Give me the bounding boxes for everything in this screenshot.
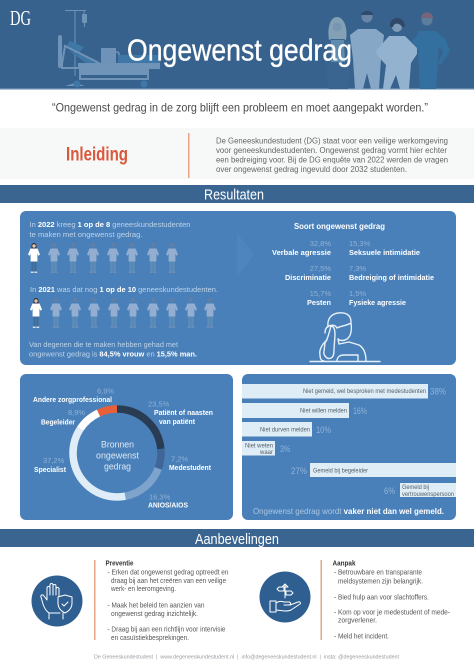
text: preventie: draag bij aan het creëren van een veilige bbox=[111, 576, 226, 585]
bar: besproken met medestudenten: Niet gemeld, wel besproken met medestudenten bbox=[303, 388, 426, 395]
illustration: hospital bed and IV pole bbox=[58, 10, 160, 88]
donut centre label: gedrag bbox=[104, 462, 131, 472]
donut labels: ANIOS/AIOS bbox=[148, 500, 188, 510]
text: 2022 bbox=[30, 220, 190, 239]
list: types left column: Discriminatie bbox=[285, 273, 331, 282]
donut labels: 6,9% bbox=[97, 386, 114, 396]
text: preventie: werk- en leeromgeving. bbox=[110, 584, 176, 593]
donut labels: 8,9% bbox=[68, 408, 85, 417]
text: preventie: Preventie bbox=[106, 560, 134, 568]
list: types right column: Seksuele intimidatie bbox=[349, 248, 420, 257]
bar: niet weten waar bbox=[242, 441, 290, 456]
donut centre label: Bronnen bbox=[101, 440, 134, 450]
text: preventie: - Erken dat ongewenst gedrag optreedt en bbox=[108, 568, 228, 576]
intro text bbox=[216, 136, 448, 174]
text: preventie: - Maak het beleid ten aanzien van bbox=[108, 600, 204, 610]
bar: niet durven melden: Niet durven melden bbox=[260, 426, 310, 434]
donut labels: Begeleider bbox=[41, 418, 75, 426]
text: 2021: In 2021 was dat nog 1 op de 10 geneeskundestudenten. bbox=[30, 285, 218, 294]
bar: besproken met medestudenten bbox=[242, 384, 446, 398]
bar chart conclusion: Ongewenst gedrag wordt vaker niet dan wel gemeld. bbox=[253, 506, 444, 516]
bar: niet weten waar: waar bbox=[259, 449, 274, 456]
bar: niet willen melden bbox=[242, 403, 367, 418]
text: gender split: Van degenen die te maken hebben gehad met bbox=[29, 340, 179, 349]
text: preventie: ongewenst gedrag inzichtelijk. bbox=[111, 609, 198, 618]
icon: hand with signpost bbox=[260, 572, 310, 622]
list: types left column: Verbale agressie bbox=[272, 248, 331, 257]
heading: soort ongewenst gedrag: Soort ongewenst gedrag bbox=[294, 222, 385, 231]
intro text: voor geneeskundestudenten. Ongewenst gedrag vormt hier echter bbox=[216, 146, 447, 155]
logo: DG bbox=[10, 6, 31, 30]
text: aanpak: - Betrouwbare en transparante bbox=[334, 568, 422, 576]
list: types right column: Fysieke agressie bbox=[349, 298, 406, 307]
list: types left column: 32,8% bbox=[310, 239, 331, 248]
donut labels: Andere zorgprofessional bbox=[33, 395, 112, 404]
quote: “Ongewenst gedrag in de zorg blijft een probleem en moet aangepakt worden.” bbox=[52, 100, 428, 114]
donut labels: 37,2% bbox=[43, 456, 65, 465]
bar: niet durven melden: 10% bbox=[316, 425, 331, 436]
panel: donut chart bbox=[20, 374, 233, 520]
bar: gemeld bij begeleider: 27% bbox=[291, 466, 307, 477]
orange divider: aanpak bbox=[320, 560, 322, 640]
text: aanpak: meldsystemen zijn belangrijk. bbox=[338, 576, 423, 586]
donut labels: Patiënt of naasten bbox=[154, 408, 213, 417]
section heading: resultaten bbox=[0, 185, 474, 204]
icon: hand with shield bbox=[32, 576, 82, 626]
donut labels: 16,3% bbox=[149, 492, 171, 502]
bar: niet weten waar: Niet weten bbox=[245, 442, 273, 450]
text: aanpak: - Bied hulp aan voor slachtoffers. bbox=[334, 592, 429, 602]
text: preventie: - Draag bij aan een richtlijn voor intervisie bbox=[108, 624, 226, 634]
text: aanpak bbox=[332, 560, 451, 640]
bar: gemeld bij vertrouwenspersoon: Gemeld bij bbox=[402, 484, 429, 491]
orange divider: preventie bbox=[94, 560, 96, 640]
intro text: over ongewenst gedrag ingevuld door 2032 studenten. bbox=[216, 165, 407, 174]
pictogram: 1 in 10 bbox=[30, 298, 216, 328]
donut labels: 23,5% bbox=[148, 400, 170, 408]
list: types right column: 15,3% bbox=[349, 239, 371, 248]
text: gender split: ongewenst gedrag is 84,5% vrouw en 15,5% man. bbox=[29, 350, 197, 358]
bar: gemeld bij begeleider bbox=[291, 463, 456, 477]
list: types left column: 15,7% bbox=[310, 289, 331, 298]
pictogram: 1 in 8 bbox=[28, 243, 178, 273]
text: preventie: en casuïstiekbesprekingen. bbox=[111, 633, 189, 642]
panel: bar chart bbox=[242, 374, 456, 520]
donut labels: Specialist bbox=[34, 465, 66, 474]
bar: besproken met medestudenten: 38% bbox=[430, 386, 446, 398]
text: 2022: In 2022 kreeg 1 op de 8 geneeskundestudenten bbox=[30, 220, 190, 229]
text: aanpak: Aanpak bbox=[332, 560, 356, 568]
donut labels: van patiënt bbox=[159, 417, 195, 426]
panel: inleiding bbox=[0, 128, 474, 179]
donut labels: 7,2% bbox=[171, 454, 188, 464]
list: types left column: 27,5% bbox=[310, 264, 331, 273]
panel: prevalence and types bbox=[20, 211, 456, 365]
list: types right column: Bedreiging of intimidatie bbox=[349, 273, 434, 282]
bar: gemeld bij vertrouwenspersoon: vertrouwenspersoon bbox=[402, 491, 454, 498]
list: types left column: Pesten bbox=[307, 298, 331, 307]
donut chart bbox=[73, 409, 161, 497]
bar: gemeld bij vertrouwenspersoon bbox=[384, 483, 456, 498]
text: aanpak: zorgverlener. bbox=[338, 616, 377, 624]
list: types left column bbox=[272, 239, 331, 307]
footer: De Geneeskundestudent | www.degeneeskundestudent.nl | info@degeneeskundestudent.nl | insta: @degeneeskundestudent bbox=[94, 654, 399, 660]
donut labels bbox=[33, 386, 213, 510]
bar: gemeld bij vertrouwenspersoon: 6% bbox=[384, 486, 395, 497]
bar: gemeld bij begeleider: Gemeld bij begeleider bbox=[313, 468, 369, 474]
intro text: een bedreiging voor. Bij de DG enquête van 2022 werden de vragen bbox=[216, 156, 448, 164]
list: types right column: 7,3% bbox=[349, 264, 366, 273]
section heading: aanbevelingen: Aanbevelingen bbox=[195, 531, 279, 548]
section heading: resultaten: Resultaten bbox=[204, 186, 264, 204]
section heading: aanbevelingen bbox=[0, 529, 474, 548]
list: types right column bbox=[349, 239, 434, 307]
icon: person with head in hand bbox=[310, 313, 380, 362]
text: 2022: te maken met ongewenst gedrag. bbox=[30, 230, 142, 239]
text: preventie bbox=[106, 560, 228, 642]
heading: inleiding: Inleiding bbox=[66, 144, 128, 166]
bar: niet weten waar: 3% bbox=[280, 444, 290, 455]
bar: niet willen melden: 16% bbox=[353, 406, 367, 417]
header banner bbox=[0, 0, 474, 90]
bar: niet willen melden: Niet willen melden bbox=[300, 408, 347, 414]
intro text: De Geneeskundestudent (DG) staat voor een veilige werkomgeving bbox=[216, 136, 448, 146]
text: gender split bbox=[29, 340, 197, 358]
illustration: healthcare workers bbox=[326, 11, 450, 89]
text: aanpak: - Meld het incident. bbox=[334, 632, 389, 640]
title: Ongewenst gedrag bbox=[127, 32, 352, 68]
text: aanpak: - Kom op voor je medestudent of mede- bbox=[334, 608, 451, 616]
list: types right column: 1,5% bbox=[349, 289, 366, 298]
donut centre label bbox=[96, 440, 139, 472]
donut centre label: ongewenst bbox=[96, 450, 139, 462]
donut labels: Medestudent bbox=[169, 463, 211, 472]
bar: niet durven melden bbox=[242, 422, 331, 436]
